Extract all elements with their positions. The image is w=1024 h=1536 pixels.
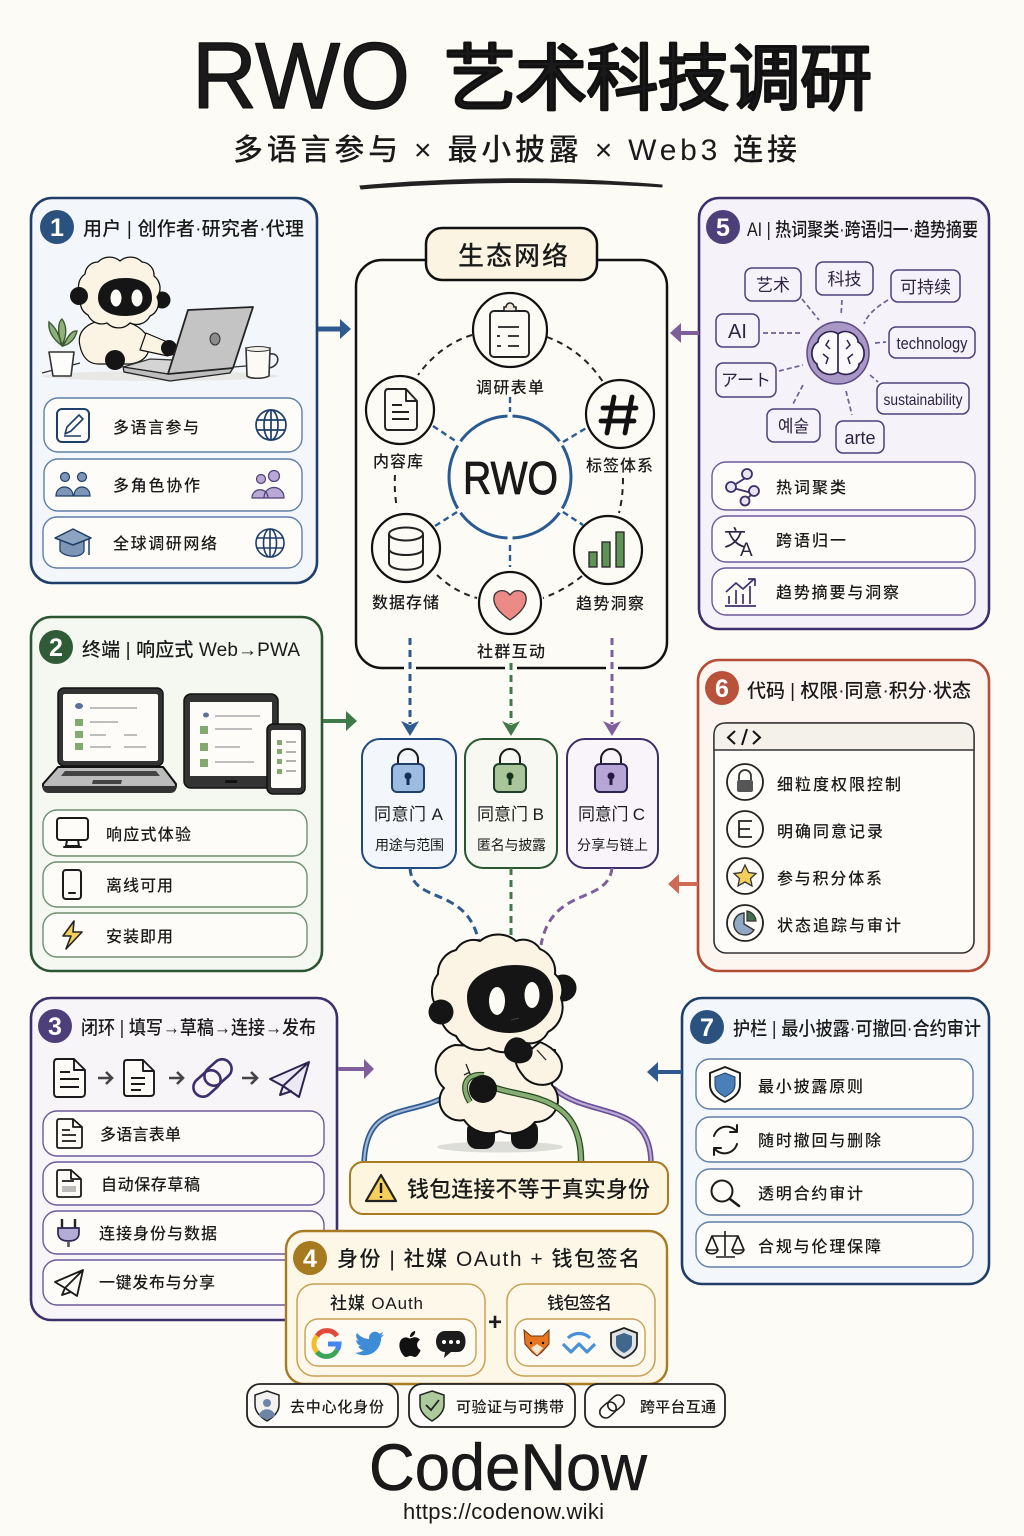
heading 1: 用户 | 创作者·研究者·代理 [83, 218, 304, 240]
ecosystem title: 生态网络 [458, 241, 568, 271]
logo: CodeNow: CodeNow [369, 1430, 647, 1504]
badge 7 [690, 1010, 724, 1044]
icon: warning triangle [366, 1175, 396, 1201]
row: autosave: 自动保存草稿 [101, 1176, 200, 1194]
title: RWO [192, 23, 410, 128]
item: consent [727, 811, 883, 847]
callout: wallet warning [350, 1162, 668, 1214]
oauth box: 社媒 OAuth [330, 1294, 423, 1313]
row: forms [43, 1111, 324, 1156]
mascot: sheep holding cables [428, 934, 581, 1163]
row: publish [43, 1260, 324, 1305]
heading 6: 代码 | 权限·同意·积分·状态 [747, 680, 971, 702]
node: community [477, 572, 545, 661]
node: survey form: 调研表单 [476, 379, 544, 397]
row: minimal disclosure: 最小披露原则 [758, 1078, 863, 1096]
node: tag system: 标签体系 [586, 457, 653, 475]
url: https://codenow.wiki [403, 1499, 604, 1524]
row: global network [43, 517, 302, 568]
row: connect [43, 1211, 324, 1254]
badge 5: 5 [716, 214, 730, 242]
item: permissions [727, 764, 901, 800]
code window [714, 723, 974, 953]
keyword links [763, 299, 888, 415]
tag: sustain zh: 可持续 [900, 278, 951, 297]
tag: art zh: 艺术 [756, 276, 790, 295]
item: consent: 明确同意记录 [777, 822, 883, 841]
row: trends summary: 趋势摘要与洞察 [776, 584, 899, 602]
item: points [727, 858, 882, 894]
row: responsive: 响应式体验 [106, 825, 191, 844]
icon: chat [436, 1331, 466, 1358]
arrow: network to gate B [502, 663, 520, 736]
row: global network: 全球调研网络 [113, 534, 217, 553]
row: multilingual [44, 398, 302, 452]
node: survey form [473, 293, 547, 397]
tag: tech zh [816, 262, 873, 295]
row: cross-language: 文 [724, 526, 746, 551]
badge 2 [39, 630, 73, 664]
gate B: 匿名与披露 [477, 837, 546, 853]
heading 3: 闭环 | 填写→草稿→连接→发布 [81, 1017, 316, 1039]
item: status: 状态追踪与审计 [777, 916, 901, 935]
title underline [360, 179, 662, 189]
arrow: network to gate A [401, 638, 419, 736]
row: revoke [696, 1117, 973, 1162]
item: status [727, 905, 901, 941]
node: data storage [372, 514, 440, 612]
row: compliance [696, 1222, 973, 1267]
row: cross-language: 跨语归一 [776, 532, 846, 550]
arrow: code to gates [668, 874, 698, 894]
row: multi-role [44, 459, 302, 511]
plus sign: + [488, 1309, 502, 1336]
item: permissions: 细粒度权限控制 [777, 775, 901, 794]
tag: technology [889, 327, 975, 358]
node: data storage: 数据存储 [372, 594, 439, 612]
tag: art ja [716, 363, 776, 397]
badge 5 [706, 210, 740, 244]
arrow: AI to network [670, 323, 699, 343]
connector: gate B to mascot [510, 868, 512, 935]
ecosystem title [426, 228, 597, 280]
row: hot word clustering: 热词聚类 [776, 479, 846, 497]
arrow: guardrails to mascot [647, 1062, 682, 1082]
flow icons [54, 1055, 309, 1101]
arrow: terminal to network [323, 711, 357, 731]
wallet box [507, 1284, 655, 1376]
row: offline [43, 862, 307, 907]
row: install: 安装即用 [106, 928, 173, 946]
tag: technology: technology [896, 334, 968, 353]
icon: brain [807, 322, 869, 384]
badge 3: 3 [48, 1013, 62, 1041]
tag: art zh [745, 268, 801, 301]
callout: wallet warning: 钱包连接不等于真实身份 [407, 1177, 650, 1202]
panel: 3 loop [31, 998, 337, 1320]
heading 7: 护栏 | 最小披露·可撤回·合约审计 [733, 1018, 981, 1040]
icon: apple [399, 1331, 421, 1357]
connector: gate C to mascot [541, 868, 612, 945]
hub: RWO [449, 412, 571, 542]
icon: wallet shield [611, 1328, 637, 1358]
heading 2: 终端 | 响应式 Web→PWA [82, 639, 300, 661]
row: multi-role: 多角色协作 [113, 477, 200, 495]
panel: 6 code [698, 660, 989, 971]
arrow: users to network [318, 319, 351, 339]
badge 1: 1 [50, 214, 64, 242]
row: cross-language [712, 516, 975, 562]
panel: 5 AI [699, 198, 989, 629]
row: contract audit: 透明合约审计 [758, 1184, 863, 1203]
panel: ecosystem network [356, 228, 667, 668]
gate B [465, 739, 557, 868]
arrow: network to gate C [603, 638, 621, 736]
tag: sustain zh [891, 270, 960, 302]
row: minimal disclosure [696, 1059, 973, 1109]
badge 6: 6 [715, 675, 729, 703]
row: compliance: 合规与伦理保障 [758, 1238, 881, 1256]
badge 6 [705, 671, 739, 705]
oauth box [297, 1284, 485, 1376]
tag: art ko: 예술 [778, 417, 809, 436]
row: hot word clustering [712, 462, 975, 510]
row: revoke: 随时撤回与删除 [758, 1132, 881, 1150]
icon: google [314, 1331, 339, 1356]
chip: verifiable [409, 1384, 575, 1427]
panel: 7 guardrails [682, 998, 989, 1284]
badge 7: 7 [700, 1014, 714, 1042]
node: content library [366, 376, 434, 471]
icon: metamask fox [524, 1330, 549, 1356]
tag: tech zh: 科技 [828, 270, 862, 289]
row: trends summary [712, 568, 975, 615]
node: trends: 趋势洞察 [576, 595, 644, 613]
node: trends [574, 516, 644, 613]
chip: decentralized identity [247, 1384, 398, 1427]
tag: sustainability [877, 383, 969, 414]
tag: art ko [767, 409, 820, 442]
heading 5: AI | 热词聚类·跨语归一·趋势摘要 [747, 219, 978, 241]
gate C: 同意门 C [578, 805, 645, 824]
badge 4: 4 [303, 1245, 317, 1273]
chip: verifiable: 可验证与可携带 [456, 1398, 564, 1416]
title [192, 23, 872, 128]
chip: cross-platform: 跨平台互通 [640, 1398, 716, 1416]
hub: RWO: RWO [463, 452, 558, 504]
wallet box: 钱包签名 [547, 1294, 612, 1313]
icon: walletconnect [563, 1334, 595, 1352]
tag: sustainability: sustainability [884, 392, 962, 409]
ring connectors [395, 335, 623, 598]
row: offline: 离线可用 [106, 877, 173, 895]
gate A: 用途与范围 [375, 837, 444, 853]
icon: twitter [355, 1332, 384, 1356]
spoke connectors [433, 397, 588, 567]
tag: AI [716, 314, 759, 347]
arrow: loop to mascot [338, 1059, 374, 1079]
badge 2: 2 [49, 634, 63, 662]
gate A: 同意门 A [374, 805, 444, 824]
row: forms: 多语言表单 [100, 1126, 181, 1144]
item: points: 参与积分体系 [777, 869, 882, 888]
row: multilingual: 多语言参与 [113, 418, 199, 437]
panel: 1 users [31, 198, 317, 583]
gate C: 分享与链上 [577, 837, 648, 853]
panel: 4 identity [286, 1231, 667, 1384]
row: cross-language: A [740, 540, 753, 561]
heading 4: 身份 | 社媒 OAuth + 钱包签名 [337, 1248, 640, 1271]
illustration: sheep at laptop [42, 257, 278, 381]
tag: art ja: アート [721, 371, 771, 390]
subtitle: 多语言参与 × 最小披露 × Web3 连接 [233, 134, 797, 167]
connector: gate A to mascot [410, 868, 479, 943]
badge 4 [293, 1241, 327, 1275]
chip: decentralized identity: 去中心化身份 [290, 1399, 384, 1416]
row: install [43, 913, 307, 957]
badge 3 [38, 1009, 72, 1043]
node: content library: 内容库 [373, 452, 423, 471]
cable: purple [553, 1088, 651, 1165]
chip: cross-platform [585, 1384, 725, 1427]
tag: arte: arte [844, 428, 876, 448]
tag: AI: AI [728, 321, 747, 343]
tag: arte [836, 421, 884, 453]
row: autosave [43, 1162, 324, 1205]
badge 1 [40, 210, 74, 244]
row: connect: 连接身份与数据 [99, 1225, 217, 1243]
node: tag system [586, 380, 654, 475]
gate C [567, 739, 658, 868]
row: responsive [43, 810, 307, 856]
row: publish: 一键发布与分享 [99, 1274, 215, 1292]
illustration: devices [43, 688, 305, 794]
gate A [362, 739, 456, 868]
cable: blue [364, 1095, 448, 1165]
gate B: 同意门 B [477, 805, 544, 824]
node: community: 社群互动 [477, 643, 545, 661]
title: 艺术科技调研 [444, 40, 872, 120]
row: contract audit [696, 1169, 973, 1215]
panel: 2 terminal [31, 617, 322, 971]
